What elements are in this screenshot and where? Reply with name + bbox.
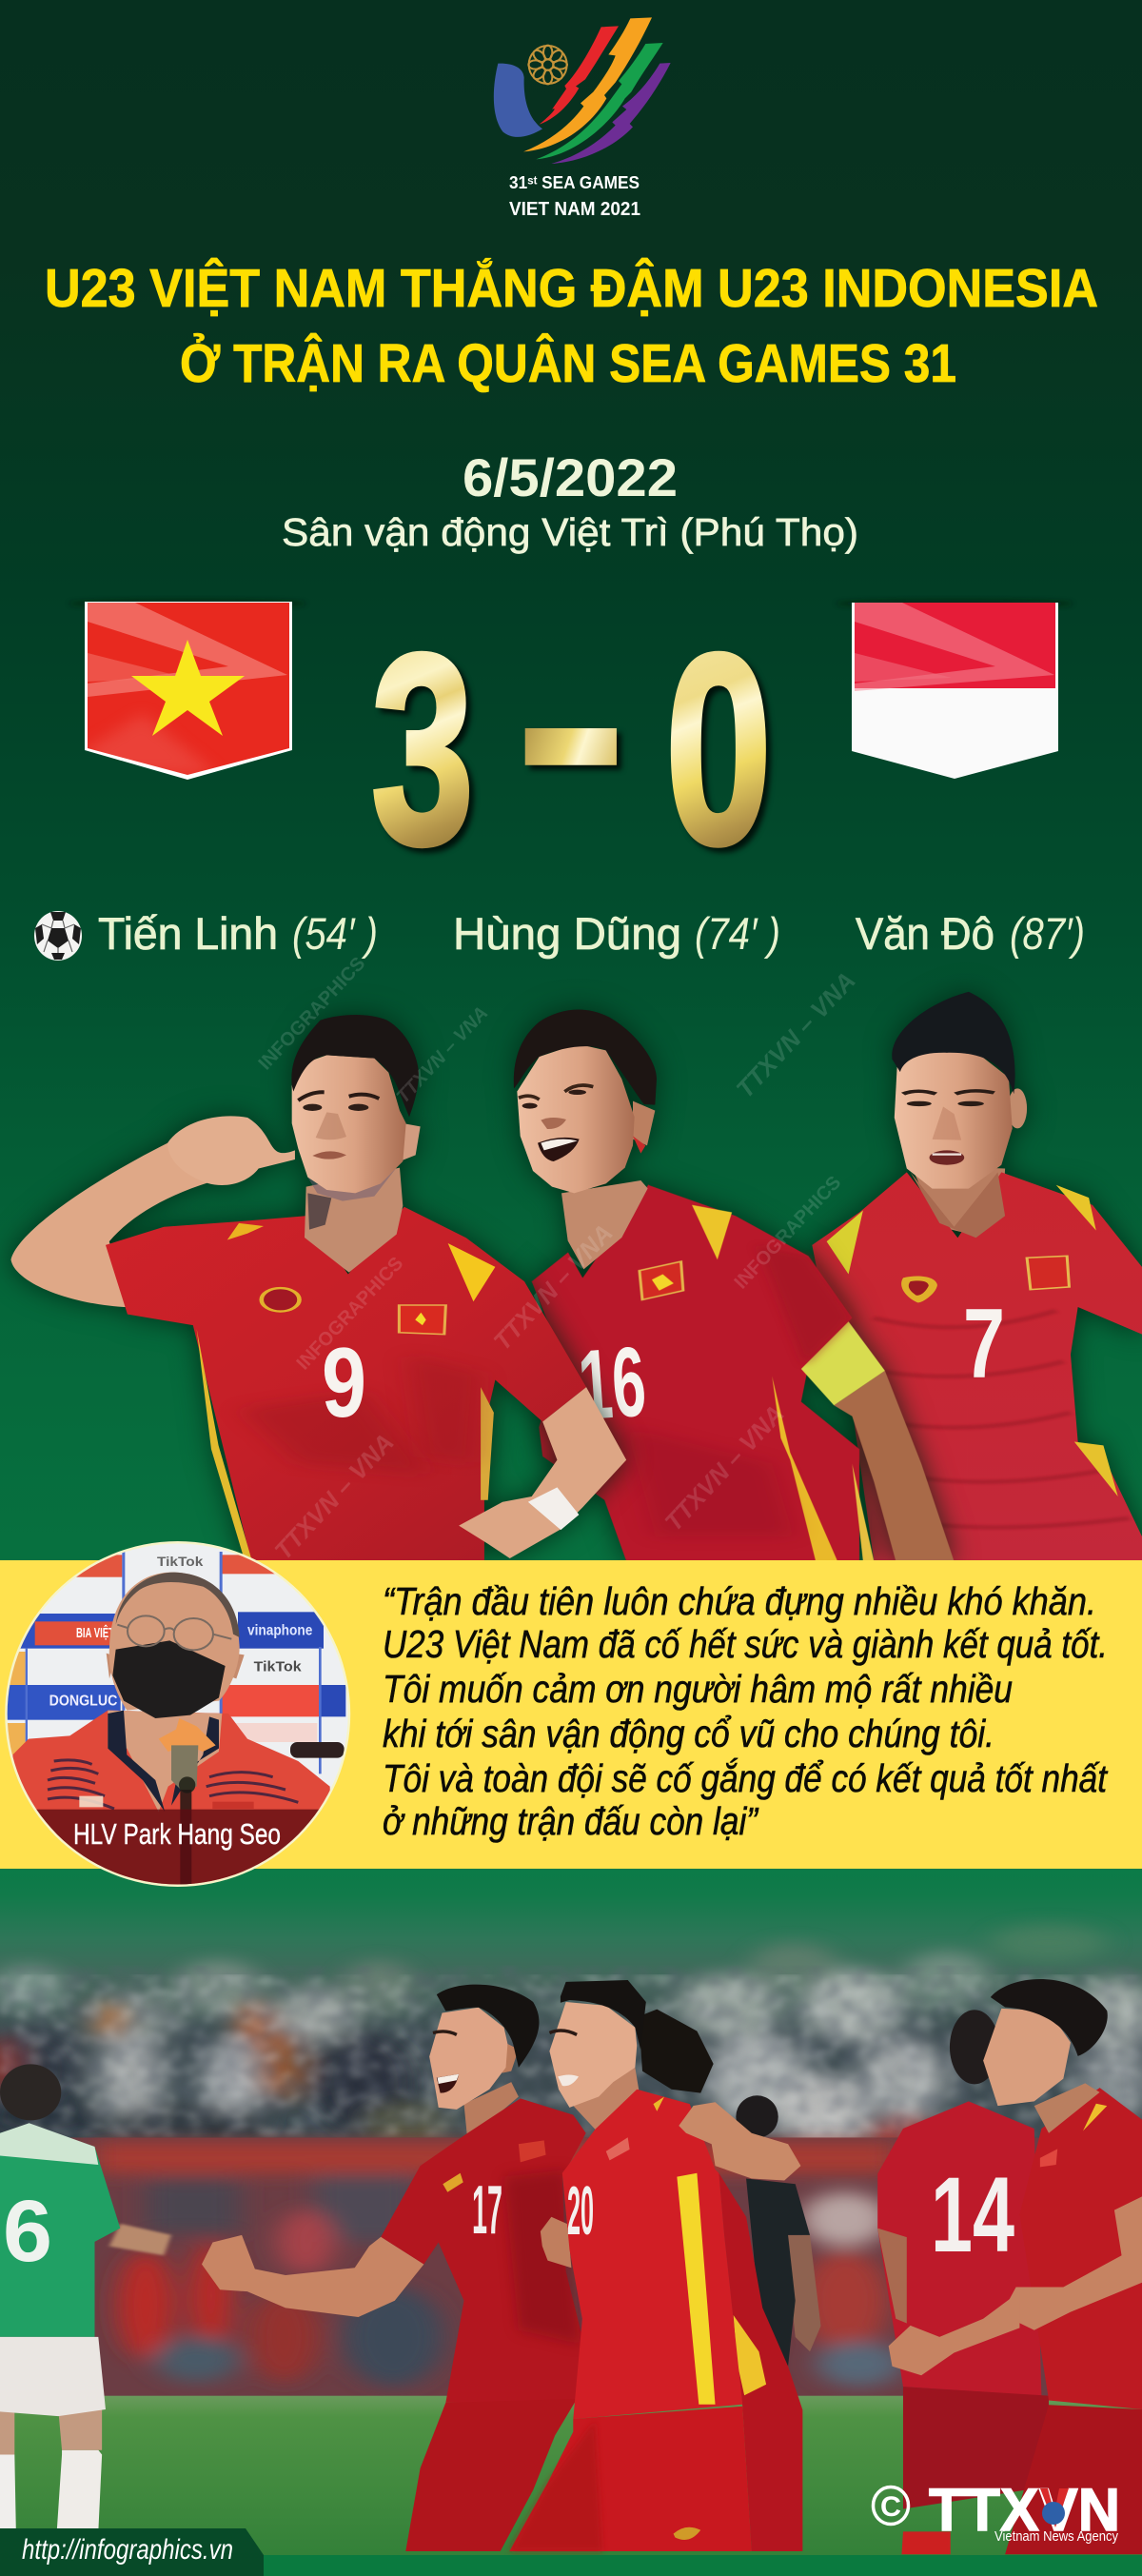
watermarks: TTXVN – VNA: [268, 1428, 400, 1565]
head of player No. 16: [514, 1009, 657, 1269]
pitch: [14, 2395, 1142, 2555]
head: [107, 1654, 245, 1678]
bottom celebration photo: [0, 1866, 1142, 2576]
crowd background: [0, 1866, 1142, 2156]
name band: [36, 1809, 320, 1885]
watermarks: INFOGRAPHICS: [255, 953, 369, 1074]
watermarks: TTXVN – VNA: [487, 1219, 619, 1356]
watermarks: TTXVN – VNA: [659, 1399, 790, 1536]
TTXVN logo: TTXVN: [929, 2477, 1120, 2544]
player No. 14: [877, 2010, 1049, 2554]
TTXVN logo: C: [880, 2491, 901, 2523]
jersey number 7: 7: [963, 1289, 1005, 1399]
score 3 - 0: -: [515, 573, 627, 875]
player No. 16: [514, 1009, 955, 1561]
goal scorers: (74′ ): [695, 908, 780, 959]
quote text: Tôi muốn cảm ơn người hâm mộ rất nhiều: [383, 1667, 1013, 1711]
score 3 - 0: 3: [371, 599, 474, 901]
mask: [112, 1640, 226, 1718]
goal scorers: Tiến Linh: [98, 908, 278, 959]
goal scorers: (54′ ): [292, 908, 378, 959]
photo jersey numbers: 20: [567, 2173, 594, 2249]
website url: http://infographics.vn: [22, 2534, 233, 2566]
sponsor boards: DONGLUC: [49, 1694, 118, 1710]
jacket: [12, 1711, 333, 1888]
photo jersey numbers: 17: [472, 2172, 502, 2249]
TTXVN logo: Vietnam News Agency: [994, 2528, 1118, 2545]
glasses: [117, 1615, 231, 1650]
goal scorers: (87′): [1010, 908, 1085, 959]
score 3 - 0: [371, 573, 772, 901]
Indonesia player: [0, 2064, 171, 2531]
head of player No. 9: [291, 1015, 421, 1273]
goal scorers: Hùng Dũng: [453, 908, 681, 959]
quote text: khi tới sân vận động cổ vũ cho chúng tôi.: [383, 1712, 994, 1755]
jersey number 16: 16: [575, 1326, 649, 1441]
player behind No. 20: [639, 2010, 802, 2551]
watermarks: TTXVN – VNA: [730, 966, 861, 1103]
title: [45, 257, 1098, 394]
photo jersey numbers: 6: [3, 2183, 52, 2280]
SEA Games logo: VIET NAM 2021: [509, 199, 640, 220]
SEA Games logo: 31ˢᵗ SEA GAMES: [509, 173, 640, 192]
microphones: [159, 1718, 216, 1752]
title: Ở TRẬN RA QUÂN SEA GAMES 31: [180, 332, 956, 394]
sponsor boards: vinaphone: [247, 1622, 312, 1638]
centre trio of players: [202, 1980, 820, 2551]
sponsor boards: TikTok: [254, 1659, 303, 1674]
footer bar: [0, 2528, 1142, 2576]
flag: Vietnam: [69, 600, 306, 780]
watermarks: [255, 953, 861, 1565]
sponsor boards: [7, 1552, 345, 1773]
panel: coach quote: [0, 1560, 1142, 1869]
photo jersey numbers: 14: [931, 2155, 1014, 2274]
player No. 9: [10, 1015, 626, 1561]
player No. 20: [509, 1980, 800, 2551]
score 3 - 0: 0: [665, 599, 772, 901]
icon: football: [34, 911, 82, 961]
goal scorers: Văn Đô: [856, 908, 994, 959]
coach portrait: [5, 1541, 350, 1887]
referee: [736, 2095, 820, 2367]
player No. 17: [202, 1985, 586, 2551]
advertising boards: [0, 2137, 1142, 2400]
watermarks: INFOGRAPHICS: [293, 1253, 407, 1374]
quote text: [383, 1579, 1108, 1843]
match date and venue: [282, 447, 858, 554]
photo jersey numbers: [6, 2178, 1014, 2262]
watermarks: TTXVN – VNA: [393, 1002, 492, 1107]
sponsor boards: TikTok: [157, 1554, 204, 1569]
sponsor boards: BIA VIỆT: [76, 1624, 114, 1641]
goal scorers: [98, 908, 1085, 959]
SEA Games logo: [494, 17, 671, 220]
flag: Indonesia: [836, 600, 1073, 779]
coach name: HLV Park Hang Seo: [73, 1817, 281, 1851]
match date and venue: 6/5/2022: [463, 447, 678, 507]
right player: [889, 1979, 1142, 2554]
player No. 7: [812, 992, 1142, 1561]
watermarks: INFOGRAPHICS: [731, 1172, 845, 1293]
jersey number 9: 9: [322, 1328, 366, 1438]
match date and venue: Sân vận động Việt Trì (Phú Thọ): [282, 510, 858, 554]
quote text: ở những trận đấu còn lại”: [383, 1799, 759, 1843]
